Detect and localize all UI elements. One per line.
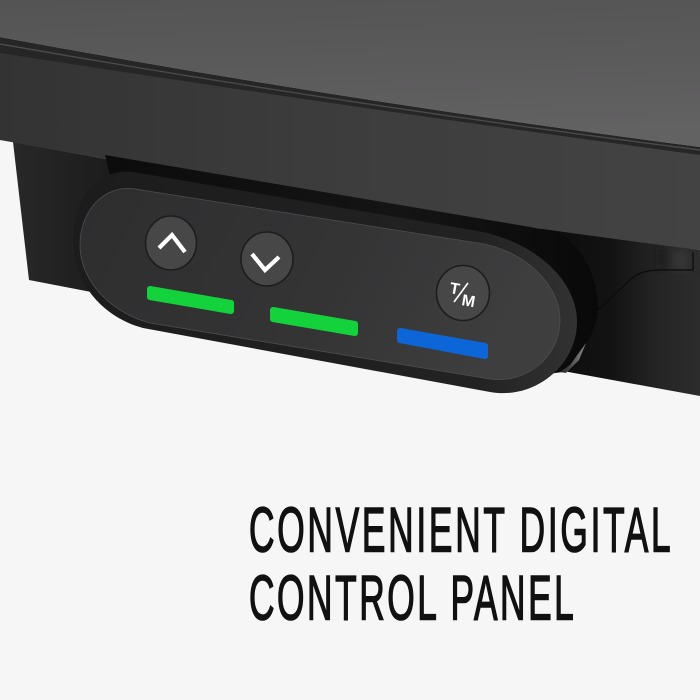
- panel outer rim: [73, 172, 577, 393]
- left mounting bracket: [13, 142, 112, 296]
- heading: [249, 495, 671, 633]
- button: down arrow: [241, 232, 293, 286]
- heading line 2: CONTROL PANEL: [249, 563, 574, 633]
- panel face: [80, 188, 560, 380]
- button: T/M: [436, 266, 490, 320]
- indicator: green bar middle: [273, 310, 355, 333]
- button: T/M: M: [460, 292, 476, 311]
- control panel: [73, 155, 598, 393]
- button: up arrow: [146, 216, 196, 270]
- panel cylinder hinge: [105, 155, 598, 380]
- desk top surface: [0, 0, 700, 147]
- desk edge groove: [0, 37, 700, 156]
- desk underside and edge: [0, 0, 700, 396]
- indicator: blue bar: [400, 331, 485, 356]
- right housing under desk: [540, 225, 700, 396]
- heading line 1: CONVENIENT DIGITAL: [249, 495, 671, 565]
- indicator: green bar left: [150, 289, 231, 311]
- button: T/M: T: [448, 280, 461, 299]
- desk front face: [0, 53, 700, 250]
